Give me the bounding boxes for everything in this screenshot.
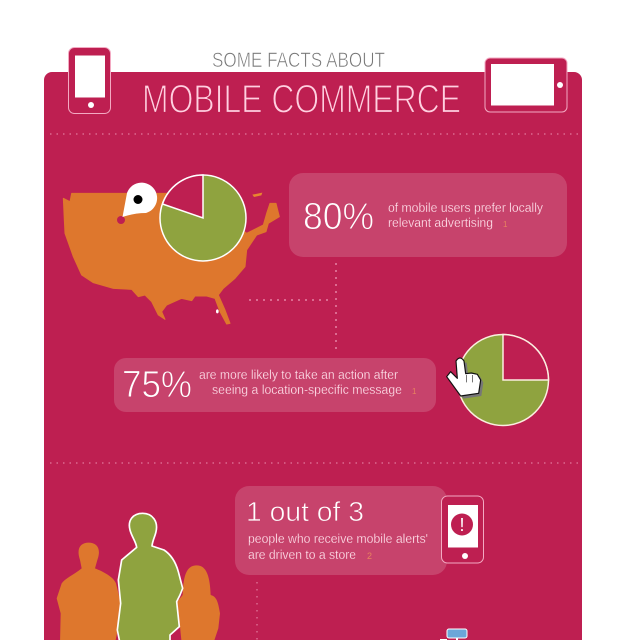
icon: tablet bbox=[485, 58, 567, 112]
panel: main background bbox=[44, 72, 582, 640]
callout: 1 out of 3 bbox=[235, 486, 447, 575]
people silhouettes bbox=[57, 513, 220, 640]
callout: 75 percent: 75% bbox=[122, 364, 192, 406]
callout: 80 percent: 80% bbox=[303, 196, 374, 238]
callout: 1 out of 3: people who receive mobile alerts' bbox=[248, 532, 428, 546]
divider dots middle bbox=[50, 462, 580, 464]
icon: phone alert bbox=[442, 496, 484, 563]
callout: 75 percent: seeing a location-specific message bbox=[212, 383, 402, 397]
pie chart: 80 percent bbox=[160, 175, 246, 261]
title: mobile commerce: MOBILE COMMERCE bbox=[142, 78, 461, 122]
callout: 75 percent: are more likely to take an action after bbox=[199, 368, 398, 382]
callout: 80 percent bbox=[289, 173, 567, 257]
connector dots bbox=[249, 263, 336, 350]
icon: phone alert: ! bbox=[459, 515, 465, 535]
callout: 75 percent: 1 bbox=[412, 387, 417, 396]
callout: 75 percent bbox=[114, 358, 436, 412]
heading: some facts about: SOME FACTS ABOUT bbox=[212, 48, 385, 72]
callout: 80 percent: of mobile users prefer locally bbox=[388, 201, 544, 215]
pie chart: 75 percent bbox=[458, 334, 548, 426]
callout: 1 out of 3: 2 bbox=[367, 551, 372, 561]
icon: blue sign bbox=[440, 629, 467, 640]
divider dots top bbox=[50, 133, 580, 135]
map: united states bbox=[63, 193, 279, 324]
icon: location pin bbox=[117, 183, 157, 224]
connector dots lower bbox=[256, 582, 258, 640]
callout: 1 out of 3: are driven to a store bbox=[248, 548, 356, 562]
icon: hand cursor bbox=[447, 358, 483, 399]
icon: phone bbox=[68, 48, 110, 114]
callout: 1 out of 3: 1 out of 3 bbox=[246, 496, 364, 527]
callout: 80 percent: 1 bbox=[503, 220, 508, 229]
callout: 80 percent: relevant advertising bbox=[388, 216, 493, 230]
